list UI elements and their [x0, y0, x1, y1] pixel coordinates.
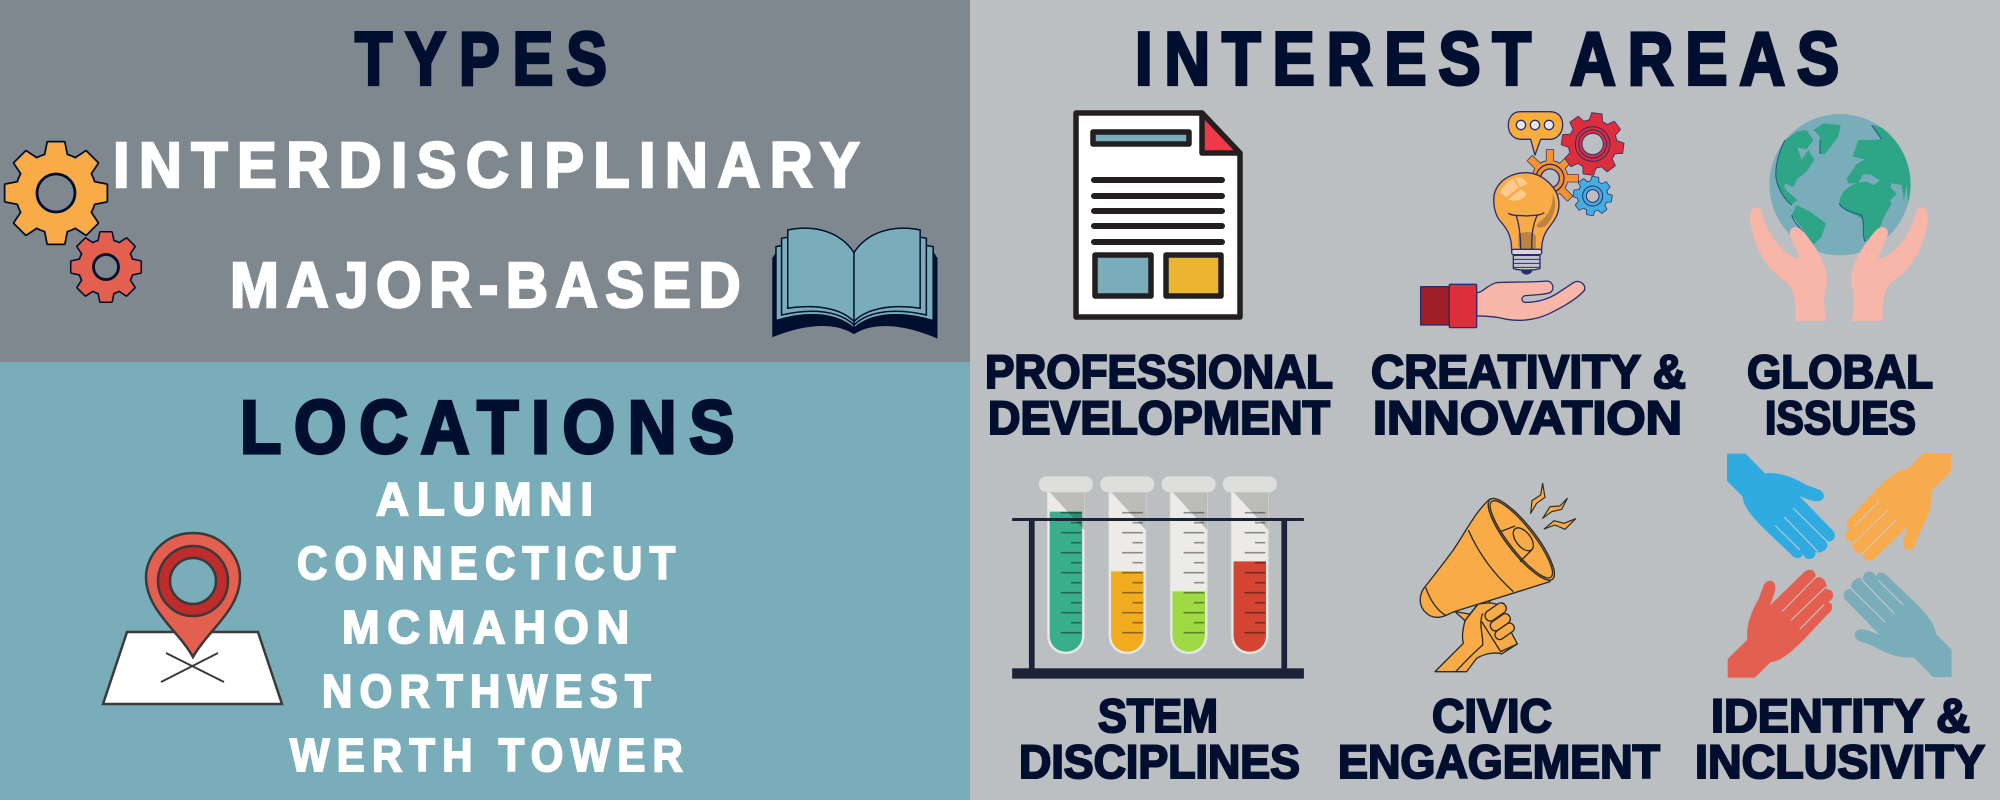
text: interdisciplinary: INTERDISCIPLINARY — [113, 129, 869, 201]
label: professional development: PROFESSIONAL — [985, 345, 1333, 398]
label: professional development: DEVELOPMENT — [988, 391, 1330, 444]
heading: locations: LOCATIONS — [240, 385, 747, 469]
icon: map pin — [103, 533, 282, 704]
label: global issues: ISSUES — [1765, 391, 1916, 444]
icon: open book — [772, 228, 937, 339]
label: stem disciplines: STEM — [1098, 689, 1218, 742]
panel: locations — [0, 362, 970, 800]
text: northwest: NORTHWEST — [322, 665, 658, 717]
label: civic engagement: ENGAGEMENT — [1338, 735, 1660, 788]
text: major-based: MAJOR-BASED — [230, 249, 748, 321]
label: stem disciplines — [1019, 689, 1300, 788]
icon: document — [1076, 113, 1240, 317]
label: identity and inclusivity: INCLUSIVITY — [1695, 735, 1985, 788]
label: creativity and innovation: CREATIVITY & — [1371, 345, 1686, 398]
text: mcmahon: MCMAHON — [342, 601, 637, 653]
label: creativity and innovation: INNOVATION — [1373, 391, 1682, 444]
label: creativity and innovation — [1371, 345, 1686, 444]
label: identity and inclusivity — [1695, 689, 1985, 788]
text: werth tower: WERTH TOWER — [290, 729, 690, 781]
text: connecticut: CONNECTICUT — [297, 537, 682, 589]
text: alumni: ALUMNI — [376, 473, 601, 525]
label: identity and inclusivity: IDENTITY & — [1711, 689, 1970, 742]
label: global issues: GLOBAL — [1747, 345, 1933, 398]
label: stem disciplines: DISCIPLINES — [1019, 735, 1300, 788]
icon: gears — [6, 142, 141, 302]
label: civic engagement: CIVIC — [1432, 689, 1552, 742]
heading: interest areas: INTEREST AREAS — [1135, 16, 1851, 100]
label: professional development — [985, 345, 1333, 444]
icon: four hands — [1727, 453, 1952, 678]
heading: types: TYPES — [355, 16, 620, 100]
panel: types — [0, 0, 970, 362]
icon: test tubes — [1012, 476, 1304, 679]
label: civic engagement — [1338, 689, 1660, 788]
icon: globe in hands — [1750, 114, 1928, 321]
icon: creativity bulb — [1421, 109, 1627, 328]
icon: megaphone — [1420, 483, 1576, 672]
panel: interest areas — [970, 0, 2000, 800]
label: global issues — [1747, 345, 1933, 444]
